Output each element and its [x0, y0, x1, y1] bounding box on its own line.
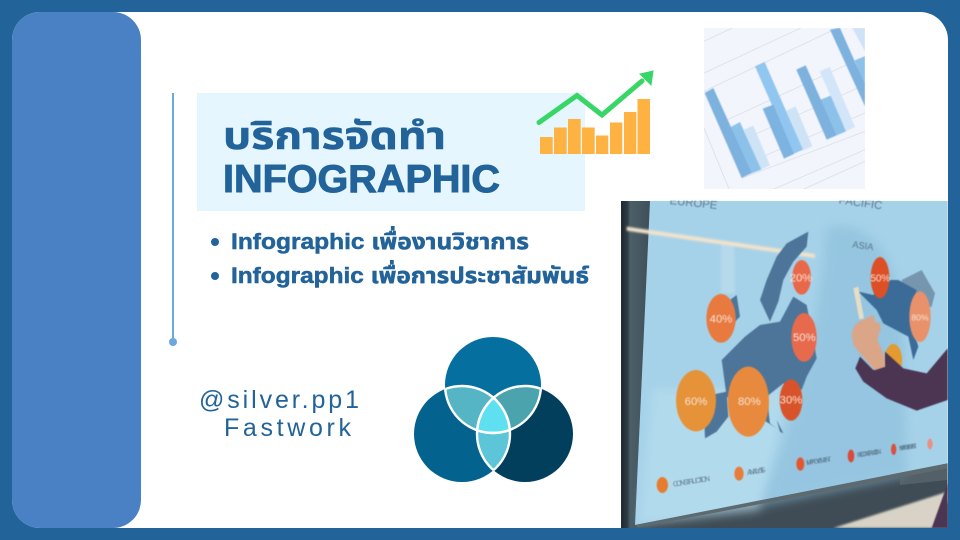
vertical timeline line with dot — [169, 93, 177, 346]
image: presenter at map screen photo — [621, 194, 948, 528]
title panel — [197, 93, 585, 211]
map headings and legend labels: RECONSTRUCTION — [857, 449, 882, 459]
handle text — [199, 386, 359, 442]
reflection streak — [721, 243, 734, 293]
map headings and legend labels: IMPROVEMENT — [899, 443, 918, 453]
Asia map — [858, 270, 935, 360]
Europe map — [703, 232, 817, 438]
screen — [635, 201, 948, 525]
map headings and legend labels: ANALYSIS — [746, 465, 766, 477]
left blue panel — [12, 12, 141, 528]
photo background — [621, 201, 948, 528]
data bubbles — [657, 257, 933, 493]
title line 1: บริการจัดทำ — [223, 116, 446, 158]
bubble labels: 80% — [911, 312, 929, 322]
map headings and legend labels: CONSTRUCTION — [672, 474, 711, 489]
map headings and legend labels: IMPROVEMENT — [806, 456, 832, 467]
presenter hand and arm — [852, 287, 948, 528]
bubble labels: 30% — [780, 395, 802, 407]
bubble labels: 50% — [870, 273, 890, 284]
icon: three-circle venn diagram — [414, 337, 573, 482]
wall below screen — [833, 492, 948, 528]
title line 2: INFOGRAPHIC — [223, 158, 500, 201]
map headings and legend labels — [669, 194, 918, 489]
map headings and legend labels: PACIFIC — [838, 194, 883, 212]
icon: growth chart — [539, 71, 653, 154]
bullet 1: Infographic เพื่องานวิชาการ — [231, 226, 529, 254]
bubble labels: 20% — [790, 272, 812, 284]
bubble labels: 40% — [710, 313, 732, 325]
bubble labels: 60% — [685, 396, 707, 408]
bullet list — [211, 226, 589, 288]
image: bar chart photo — [704, 28, 865, 189]
bubble labels — [685, 272, 929, 408]
bubble labels: 80% — [738, 396, 761, 408]
bullet 2: Infographic เพื่อการประชาสัมพันธ์ — [231, 260, 589, 288]
glare — [627, 227, 815, 258]
map headings and legend labels: ASIA — [852, 239, 875, 252]
bubble labels: 50% — [793, 332, 816, 344]
map headings and legend labels: EUROPE — [669, 195, 718, 212]
platform name: Fastwork — [224, 414, 352, 442]
account name: @silver.pp1 — [199, 386, 359, 414]
